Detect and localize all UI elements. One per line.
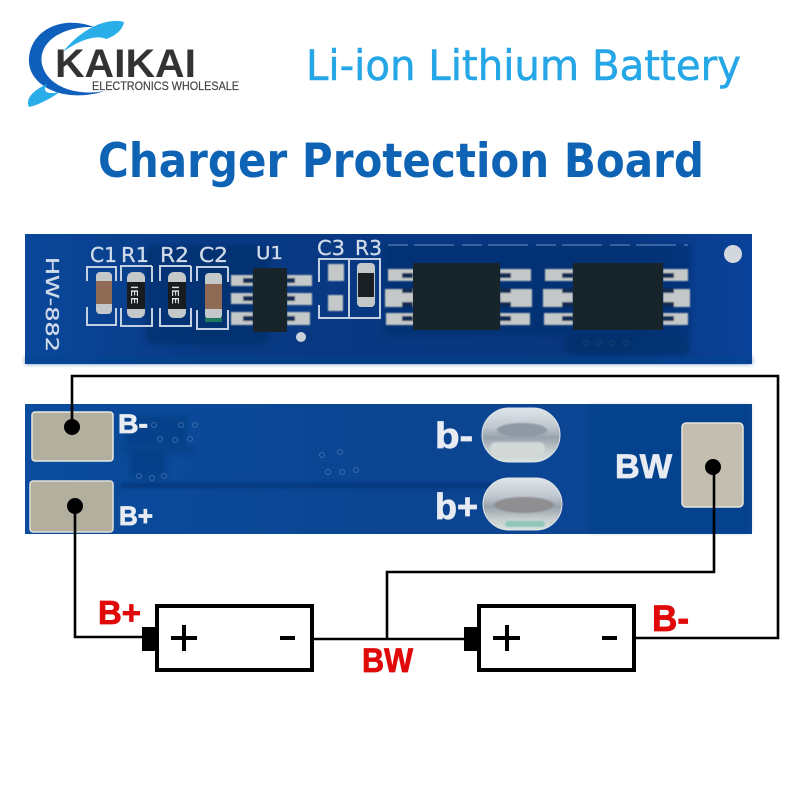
silkscreen: component labels: [90, 236, 382, 267]
board substrate: [25, 234, 752, 364]
silkscreen: component labels: R3: [355, 236, 382, 260]
silkscreen: component labels: R1: [121, 243, 149, 267]
resistor R2: IEE: [169, 286, 180, 304]
label: B+: B+: [98, 594, 141, 631]
board substrate: [25, 404, 752, 534]
solder blob P+: [483, 478, 562, 530]
via row: [584, 340, 628, 346]
wire: BM to mid-point: [387, 467, 714, 639]
capacitor C1: [96, 272, 112, 314]
capacitor C3 pads: [328, 264, 344, 311]
resistor R1: [127, 272, 145, 318]
wire: B- to battery 2 negative: [72, 376, 778, 638]
silkscreen: B-: B-: [118, 409, 148, 439]
connection dot B-: [64, 419, 80, 435]
resistor R1: IEE: [128, 286, 139, 304]
pad BM: [682, 423, 743, 507]
panel: top side of PCB: [25, 234, 752, 364]
logo swoosh: dark blue crescent: [29, 23, 105, 95]
silkscreen: component outlines: [87, 259, 380, 329]
silkscreen: component labels: C3: [317, 236, 345, 260]
panel: bottom side of PCB: [25, 404, 752, 534]
logo swoosh: light blue upper: [63, 21, 124, 52]
silkscreen: B+: B+: [119, 501, 153, 531]
chip 2 with pads: [385, 263, 532, 330]
mounting hole: [724, 245, 742, 263]
silkscreen: component labels: U1: [256, 243, 283, 264]
resistor R3: [357, 263, 375, 307]
silkscreen: component labels: C1: [90, 243, 117, 267]
label: BM mirrored: BW: [362, 642, 414, 680]
silkscreen: BM mirrored: BW: [615, 448, 673, 486]
wire: B+ to battery 1 positive: [75, 506, 145, 637]
test point: [296, 332, 306, 342]
solder blob P-: [482, 408, 560, 462]
resistor R2: [168, 272, 186, 318]
silkscreen: component labels: R2: [160, 243, 189, 267]
title line 1: Li-ion Lithium Battery: [306, 41, 741, 90]
silkscreen: P+ mirrored: b+: [435, 486, 478, 527]
copper tint areas: [120, 406, 750, 532]
wiring diagram: [64, 376, 778, 680]
wire: between batteries: [313, 638, 466, 640]
logo wordmark: KAIKAI: [55, 42, 196, 86]
pads beside U1: [231, 275, 312, 325]
pad B-: [32, 412, 113, 461]
battery 1: [142, 606, 312, 670]
via clusters: [136, 422, 358, 480]
silkscreen: component labels: C2: [199, 243, 228, 267]
logo: KaiKai Electronics Wholesale: [28, 21, 239, 107]
connection dot BM: [705, 459, 721, 475]
label: B-: B-: [652, 598, 689, 639]
connection dot B+: [67, 498, 83, 514]
chip 3 with pads: [543, 263, 690, 330]
silkscreen trace line: [388, 244, 688, 246]
logo swoosh: light blue lower: [28, 84, 60, 107]
capacitor C2: [205, 273, 222, 322]
title line 2: Charger Protection Board: [98, 134, 704, 189]
silkscreen: HW-882: HW-882: [41, 257, 62, 352]
silkscreen: P- mirrored: b-: [435, 415, 473, 456]
battery 2: [464, 606, 634, 670]
pad B+: [30, 481, 113, 532]
logo tagline: ELECTRONICS WHOLESALE: [92, 79, 239, 93]
chip U1: [253, 268, 287, 332]
copper tint areas: [25, 245, 752, 364]
